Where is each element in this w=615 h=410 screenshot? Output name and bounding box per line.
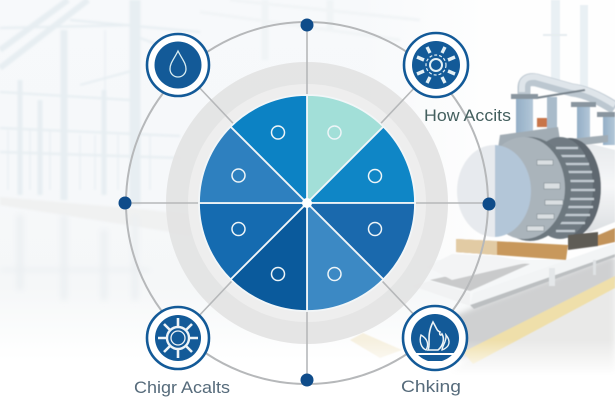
wood base — [456, 239, 568, 260]
graphic: outer orbit with spokes — [125, 22, 489, 384]
end disc — [457, 145, 496, 237]
flange — [489, 137, 571, 241]
pie chart: eight segments — [199, 95, 415, 311]
top fixture — [498, 127, 608, 148]
icon: cog wheel — [147, 307, 209, 369]
background: floor and yellow stripe — [330, 255, 615, 410]
floor reflections — [0, 215, 150, 300]
label: Chking: Chking — [401, 378, 461, 396]
pipes — [524, 80, 615, 108]
icon: gear with rays — [404, 33, 468, 97]
chimneys — [551, 0, 560, 90]
segment: bottom left — [231, 203, 307, 311]
motor body — [570, 140, 615, 232]
illustration: industrial motor and pipework — [444, 0, 615, 309]
icon: flame — [403, 306, 467, 370]
segment: right lower — [307, 203, 415, 279]
graphic: grey halo rings — [166, 62, 448, 344]
icon: water drop — [147, 34, 209, 96]
segment: left lower — [199, 203, 307, 279]
segment: top left — [231, 95, 307, 203]
segment: bottom right — [307, 203, 383, 311]
white rail — [470, 254, 615, 309]
segment: right upper — [307, 127, 415, 203]
segment: top right (mint) — [307, 95, 383, 203]
segment: left upper — [199, 127, 307, 203]
center hub — [302, 198, 312, 208]
label: Chigr Acalts: Chigr Acalts — [134, 379, 230, 397]
label: How Accits: How Accits — [424, 107, 511, 125]
cooling fins — [539, 138, 601, 238]
floor kerb — [0, 197, 190, 235]
segment markers — [232, 126, 382, 280]
orbit node dots — [118, 18, 496, 386]
